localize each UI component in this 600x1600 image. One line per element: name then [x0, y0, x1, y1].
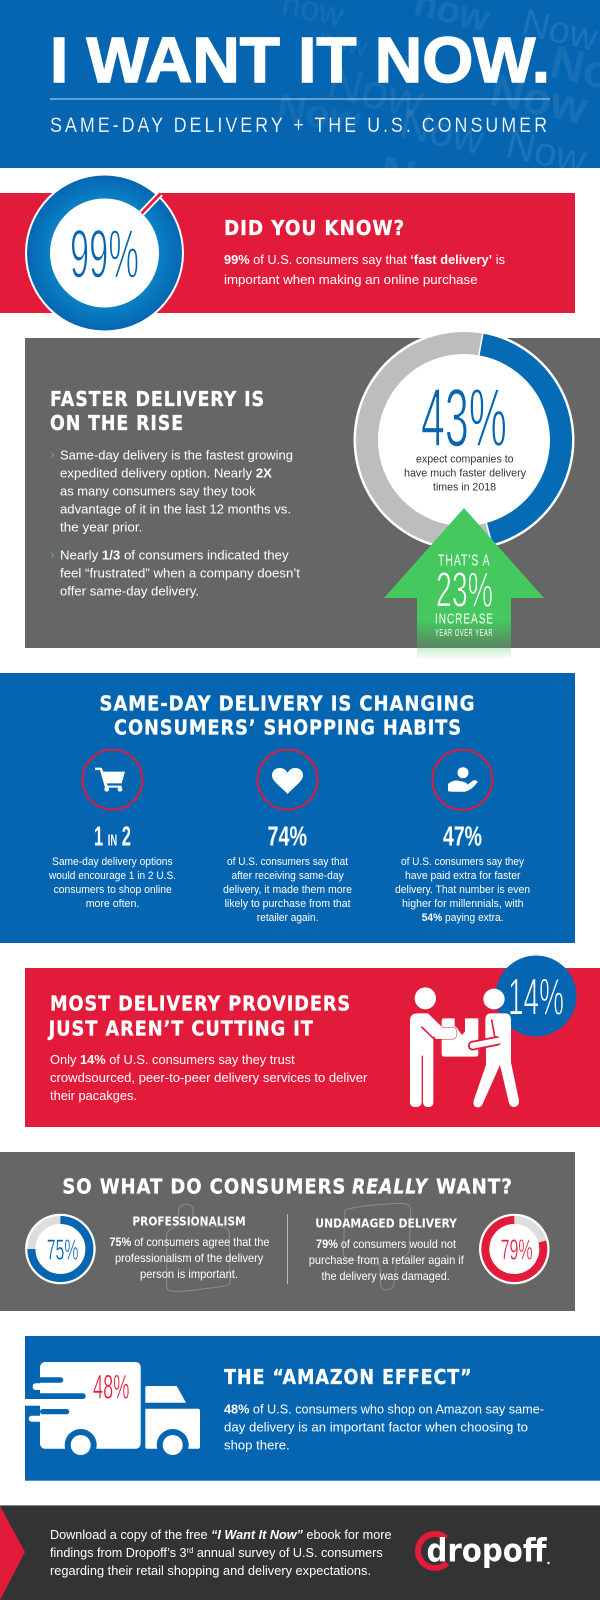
stat: 1 in 2: consumers to shop online: [54, 884, 172, 896]
bullet list: feel “frustrated” when a company doesn’t: [60, 565, 300, 580]
stat: 74%: after receiving same-day: [232, 870, 344, 882]
stat: 1 in 2: [48, 820, 176, 910]
heading: JUST AREN’T CUTTING IT: [47, 1016, 314, 1040]
stat: 74%: retailer again.: [257, 912, 318, 924]
text block: shop there.: [224, 1437, 290, 1452]
bullet list: Same-day delivery is the fastest growing: [60, 447, 293, 462]
heading: ON THE RISE: [50, 411, 184, 435]
header banner: [0, 0, 600, 168]
icon: thumbs up outline: [167, 1204, 230, 1291]
heading: CONSUMERS’ SHOPPING HABITS: [114, 716, 462, 740]
text block: undamaged delivery: [309, 1215, 465, 1283]
icon: hand holding person: [432, 750, 492, 810]
stat: 74%: [223, 820, 352, 924]
bullet list: ›: [50, 548, 54, 562]
text block: rd: [187, 1546, 193, 1555]
chart: 99% donut: 99%: [70, 216, 139, 293]
heading: [62, 1174, 513, 1198]
bullet list: the year prior.: [60, 519, 142, 534]
text block: crowdsourced, peer-to-peer delivery services to deliver: [50, 1070, 368, 1085]
text block: [50, 1527, 392, 1578]
stat: 47%: [395, 820, 530, 924]
heading: WANT?: [436, 1174, 513, 1198]
panel: faster delivery: [25, 330, 600, 660]
stat: 1 in 2: 1 IN 2: [94, 820, 131, 851]
logo: dropoff: dropoff: [426, 1532, 547, 1570]
icon: delivery truck: 48%: [93, 1368, 129, 1406]
chart: 75% donut: [25, 1214, 96, 1284]
chart: 75% donut: 75%: [47, 1234, 78, 1266]
text block: Download a copy of the free “I Want It Now” ebook for more: [50, 1527, 392, 1542]
text block: undamaged delivery: the delivery was damaged.: [322, 1270, 450, 1283]
heading: SO WHAT DO CONSUMERS: [62, 1174, 346, 1198]
text block: undamaged delivery: purchase from a retailer again if: [309, 1254, 465, 1267]
stat: 47%: higher for millennials, with: [402, 898, 524, 910]
arrow: 23% increase: 23%: [436, 563, 493, 617]
stat: 74%: of U.S. consumers say that: [227, 856, 348, 868]
bullet list: offer same-day delivery.: [60, 583, 199, 598]
heading: SAME-DAY DELIVERY IS CHANGING: [100, 692, 475, 716]
text block: professionalism: person is important.: [140, 1268, 238, 1281]
icon: thumbs down outline: [343, 1203, 411, 1290]
icon: delivery truck: [25, 1362, 200, 1461]
panel: footer: [0, 1505, 600, 1600]
icon: two people handing over a package: [410, 987, 519, 1107]
heading: [50, 387, 265, 435]
background pattern of the word Now: Now: [375, 146, 489, 219]
red chevron: [0, 1506, 25, 1600]
text block: undamaged delivery: UNDAMAGED DELIVERY: [315, 1215, 458, 1230]
chart: 43% donut: have much faster delivery: [404, 468, 527, 480]
chart: 43% donut: [354, 330, 574, 550]
stat: 1 in 2: more often.: [86, 898, 139, 910]
bullet list: Nearly 1/3 of consumers indicated they: [60, 547, 289, 562]
stat: 47%: have paid extra for faster: [405, 870, 521, 882]
text block: their pacakges.: [50, 1088, 137, 1103]
stat: 47%: 47%: [443, 820, 482, 851]
text block: [224, 252, 505, 287]
stat: 47%: 54% paying extra.: [422, 912, 504, 924]
chart: 43% donut: 43%: [421, 371, 507, 464]
background pattern of the word Now: Now: [273, 86, 365, 144]
bullet list: expedited delivery option. Nearly 2X: [60, 465, 272, 480]
arrow: 23% increase: [384, 508, 544, 660]
background pattern of the word Now: Now: [396, 99, 489, 164]
bullet list: as many consumers say they took: [60, 483, 256, 498]
stat: 1 in 2: would encourage 1 in 2 U.S.: [48, 870, 176, 882]
stat: 74%: delivery, it made them more: [223, 884, 352, 896]
text block: professionalism: [110, 1213, 269, 1281]
text block: 48% of U.S. consumers who shop on Amazon say same-: [224, 1401, 544, 1416]
stat: 74%: likely to purchase from that: [225, 898, 351, 910]
icon: shopping cart: [82, 750, 142, 810]
panel: what consumers want: [0, 1152, 575, 1311]
text block: findings from Dropoff’s 3: [50, 1545, 193, 1560]
chart: 43% donut: times in 2018: [433, 482, 496, 494]
icon: heart: [258, 750, 318, 810]
panel: amazon effect: [25, 1336, 600, 1481]
stat: 47%: of U.S. consumers say they: [401, 856, 525, 868]
bullet list: ›: [50, 448, 54, 462]
panel: shopping habits: [0, 673, 575, 943]
arrow: 23% increase: THAT'S A: [438, 552, 491, 570]
text block: [224, 1401, 544, 1452]
bullet list: [50, 447, 300, 598]
heading: THE “AMAZON EFFECT”: [224, 1365, 473, 1389]
heading: DID YOU KNOW?: [224, 216, 405, 240]
background pattern of the word Now: [278, 0, 600, 168]
text block: professionalism: 75% of consumers agree that the: [110, 1236, 269, 1249]
chart: 79% donut: 79%: [501, 1234, 533, 1266]
stat: 74%: 74%: [268, 820, 307, 851]
text block: Only 14% of U.S. consumers say they trust: [50, 1052, 295, 1067]
panel: did you know: [0, 174, 575, 332]
stat: 47%: delivery. That number is even: [395, 884, 530, 896]
heading: REALLY: [352, 1174, 429, 1198]
text block: regarding their retail shopping and delivery expectations.: [50, 1563, 371, 1578]
text block: annual survey of U.S. consumers: [193, 1545, 383, 1560]
heading: [100, 692, 475, 740]
background pattern of the word Now: now: [316, 23, 371, 62]
stat: 1 in 2: Same-day delivery options: [52, 856, 173, 868]
background pattern of the word Now: Now: [322, 55, 429, 130]
text block: [50, 1052, 368, 1103]
text block: professionalism: PROFESSIONALISM: [132, 1213, 246, 1228]
chart: 79% donut: [479, 1214, 550, 1284]
arrow: 23% increase: INCREASE: [435, 610, 494, 627]
text block: day delivery is an important factor when choosing to: [224, 1419, 528, 1434]
text block: professionalism: professionalism of the delivery: [115, 1252, 263, 1265]
text block: 99% of U.S. consumers say that ‘fast delivery’ is: [224, 252, 505, 267]
chart: 43% donut: expect companies to: [416, 454, 514, 466]
heading: [47, 992, 351, 1040]
bullet list: advantage of it in the last 12 months vs.: [60, 501, 291, 516]
title: I WANT IT NOW.: [50, 24, 550, 96]
badge: 14%: [496, 956, 576, 1036]
background pattern of the word Now: Now: [486, 63, 592, 134]
background pattern of the word Now: Now: [518, 2, 600, 60]
text block: undamaged delivery: 79% of consumers would not: [316, 1238, 457, 1251]
heading: MOST DELIVERY PROVIDERS: [50, 992, 351, 1016]
background pattern of the word Now: Now: [502, 122, 590, 183]
panel: delivery providers: [25, 956, 600, 1127]
arrow: 23% increase: YEAR OVER YEAR: [435, 628, 493, 639]
chart: 99% donut: [25, 174, 184, 332]
heading: FASTER DELIVERY IS: [50, 387, 265, 411]
text block: important when making an online purchase: [224, 272, 478, 287]
